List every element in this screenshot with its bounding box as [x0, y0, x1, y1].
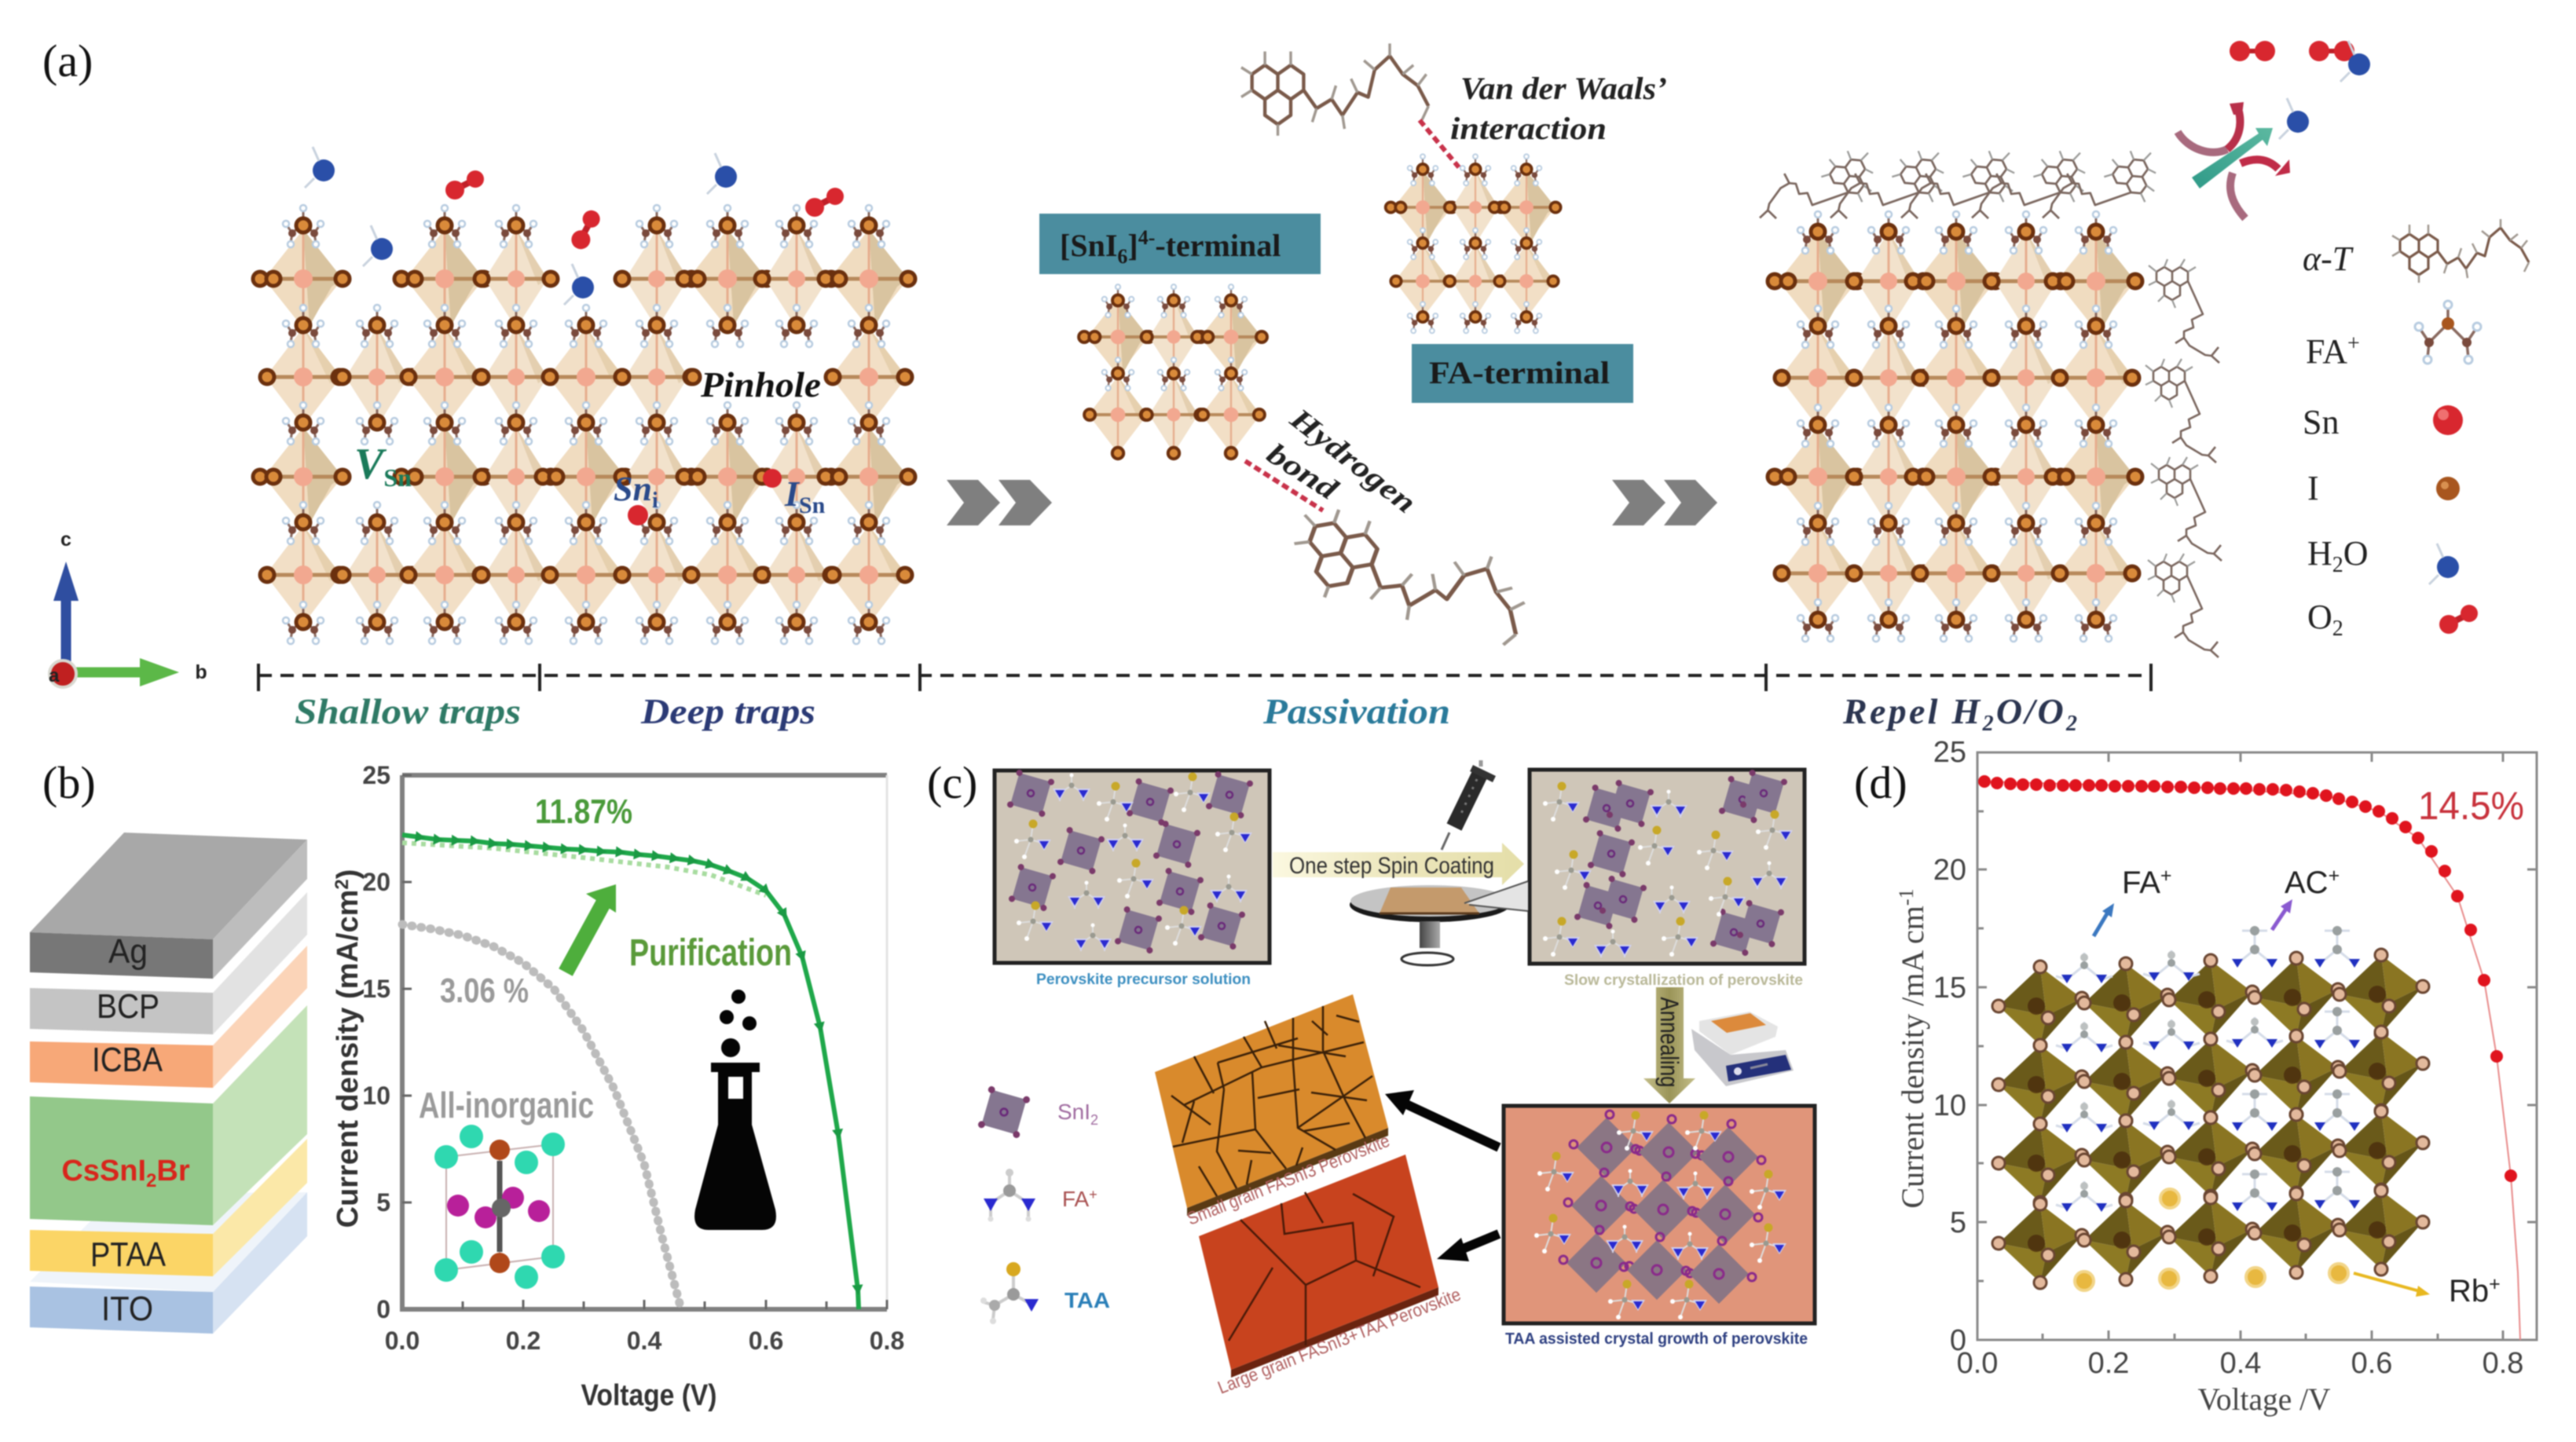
chart b x tick labels: 0.6: [749, 1327, 783, 1355]
process chevrons left: [947, 480, 1052, 525]
chart d x tick labels: 0.2: [2088, 1347, 2129, 1380]
arrow FA+: [2094, 903, 2114, 936]
legend FA+: +: [2347, 331, 2360, 356]
pipette: [1442, 760, 1494, 850]
passivated perovskite lattice: [1768, 211, 2142, 642]
chart b x axis title: Voltage (V): [581, 1379, 716, 1412]
alpha-T molecule van der Waals: [1241, 43, 1428, 136]
SnI6 terminal box: [1039, 214, 1321, 274]
dashed stage bracket: [258, 664, 2151, 691]
legend FA+: [2306, 301, 2481, 371]
chart d frame and ticks: [1977, 752, 2537, 1340]
legend Sn: Sn: [2303, 403, 2339, 441]
stage labels: 2: [1982, 712, 1994, 736]
label 11.87 percent: 11.87%: [535, 792, 632, 831]
chart b y axis title: Current density (mA/cm: [332, 890, 365, 1228]
label AC+: AC: [2285, 866, 2329, 900]
van der Waals label: interaction: [1450, 111, 1607, 146]
large grain film: [1199, 1155, 1438, 1378]
layer PTAA: PTAA: [90, 1235, 167, 1274]
legend SnI2: [977, 1085, 1098, 1139]
pinhole label: Pinhole: [700, 364, 821, 404]
efficiency label: 14.5%: [2418, 784, 2524, 828]
process chevrons right: [1612, 480, 1717, 525]
hydrogen dashed bond: [1245, 461, 1323, 511]
chart b y tick labels: [362, 761, 390, 1323]
chart d x tick labels: 0.0: [1957, 1347, 1998, 1380]
panel b: device stack and JV curve: [30, 757, 904, 1412]
alpha-T molecule hydrogen bond: [1281, 492, 1538, 663]
I_Sn label: I: [785, 474, 799, 514]
JV data points: [1978, 775, 2517, 1182]
chart b y tick labels: 20: [362, 868, 390, 896]
SnI6 terminal box: -terminal: [1155, 228, 1281, 263]
defect atoms: [628, 469, 782, 525]
layer perovskite: 2: [146, 1170, 156, 1191]
arrow to small grain film: [1385, 1090, 1499, 1147]
TAA assisted growth box: [1504, 1106, 1815, 1323]
legend Sn: [2303, 403, 2463, 441]
chart d y tick labels: 15: [1933, 972, 1966, 1005]
hydrogen bond label: bond: [1261, 437, 1344, 507]
layer Ag: [30, 833, 307, 979]
layer perovskite: Br: [156, 1155, 190, 1188]
layer perovskite: CsSnI: [61, 1155, 146, 1188]
JV chart: [332, 761, 904, 1412]
FA-terminal box: FA-terminal: [1429, 355, 1610, 390]
spin coating arrow: One step Spin Coating: [1289, 853, 1494, 879]
label all-inorganic: All-inorganic: [419, 1085, 594, 1125]
caption TAA growth: TAA assisted crystal growth of perovskite: [1505, 1330, 1808, 1348]
stage labels: Deep traps: [640, 691, 815, 731]
alpha-T side capping layer: [2145, 259, 2222, 657]
layer Ag: Ag: [108, 932, 148, 971]
FA-terminal box: [1412, 344, 1633, 403]
stage labels: Repel H: [1843, 691, 1980, 731]
hotplate: [1691, 1012, 1794, 1086]
chart b x tick labels: 0.4: [627, 1327, 661, 1355]
legend H2O: [2307, 534, 2459, 584]
label FA+: +: [2160, 865, 2172, 887]
fitted JV line: [1984, 781, 2520, 1340]
panel label b: (b): [42, 757, 96, 808]
slow crystallization box: [1530, 769, 1805, 964]
precursor solution box: [995, 769, 1270, 963]
crystal axes: a: [49, 665, 60, 686]
stage labels: Passivation: [1262, 691, 1450, 731]
annealing arrow: Annealing: [1655, 997, 1684, 1087]
chart b y tick labels: 0: [376, 1295, 390, 1323]
curve all-inorganic control: [402, 924, 681, 1309]
chart d y tick labels: [1933, 736, 1966, 1357]
panel c: film formation process: [927, 757, 1815, 1398]
chart d y axis title: -1: [1895, 888, 1918, 906]
small grain film: [1155, 994, 1388, 1216]
curve purified: [402, 835, 859, 1309]
layer ITO: ITO: [101, 1290, 153, 1328]
repelled molecules and arrows: [2178, 41, 2370, 218]
legend FA+: FA: [2306, 332, 2347, 371]
chart b y axis title: 2: [332, 879, 353, 890]
V_Sn label: Sn: [383, 463, 412, 492]
layer ICBA: [30, 946, 307, 1088]
legend SnI2: SnI: [1057, 1100, 1090, 1124]
chart b x tick labels: 0.8: [870, 1327, 904, 1355]
chart d y tick labels: 20: [1933, 854, 1966, 887]
label Rb+: Rb: [2449, 1274, 2489, 1308]
label FA+: FA: [2122, 866, 2160, 900]
layer perovskite: [30, 1005, 307, 1225]
crystal axes: c: [60, 529, 71, 551]
caption slow crystallization: Slow crystallization of perovskite: [1564, 972, 1803, 989]
chart d x tick labels: [1957, 1347, 2523, 1380]
green improvement arrow: [566, 884, 616, 972]
van der Waals dashed bond: [1420, 120, 1459, 167]
alpha-T top capping layer: [1760, 144, 2157, 227]
caption small grain: Small grain FASnI3 Perovskite: [1184, 1130, 1392, 1229]
hydrogen bond label: [1261, 401, 1422, 520]
legend H2O: 2: [2332, 553, 2343, 577]
panel label c: (c): [927, 757, 977, 808]
legend TAA: TAA: [1064, 1288, 1110, 1312]
SnI6 terminal box: ]: [1127, 228, 1138, 263]
panel label a: (a): [42, 35, 93, 86]
legend O2: [2307, 598, 2478, 641]
chart d y tick labels: 0: [1950, 1324, 1966, 1357]
legend TAA: [980, 1262, 1110, 1324]
legend FA+: [984, 1169, 1097, 1222]
label AC+: +: [2329, 865, 2340, 887]
crystal axes: [49, 529, 207, 687]
caption precursor: Perovskite precursor solution: [1036, 972, 1251, 988]
layer BCP: BCP: [97, 987, 159, 1026]
crystal structure: [1992, 926, 2429, 1290]
legend I: [2307, 469, 2460, 507]
panel label d: (d): [1854, 757, 1907, 808]
chart d y tick labels: 10: [1933, 1089, 1966, 1122]
hydrogen bond label: Hydrogen: [1284, 401, 1422, 520]
panel d: JV curve with crystal structure: [1854, 736, 2537, 1417]
arrow Rb+: [2354, 1273, 2430, 1297]
chart b y tick labels: 10: [362, 1082, 390, 1110]
device layer stack: [30, 833, 307, 1334]
chart b x tick labels: 0.0: [385, 1327, 420, 1355]
chart b y axis title: ): [332, 869, 365, 879]
curve purified reverse scan: [402, 843, 766, 895]
SnI6-terminated slab: [1079, 284, 1267, 459]
chart b y tick labels: 5: [376, 1188, 390, 1217]
SnI6 terminal box: [SnI: [1060, 228, 1117, 263]
defective perovskite lattice: [253, 205, 915, 644]
legend H2O: H: [2307, 534, 2332, 573]
legend alpha-T: [2303, 219, 2529, 283]
legend H2O: O: [2343, 534, 2369, 573]
legend alpha-T: α-T: [2303, 240, 2354, 278]
chart d x tick labels: 0.8: [2483, 1347, 2523, 1380]
annealing arrow: [1643, 987, 1695, 1103]
crystal axes: b: [195, 661, 207, 683]
legend I: I: [2307, 469, 2319, 507]
label Rb+: +: [2489, 1273, 2501, 1295]
icon: unit cell: [434, 1125, 565, 1289]
spin coater: [1350, 881, 1528, 965]
legend O2: O: [2307, 598, 2332, 636]
legend O2: 2: [2332, 617, 2343, 641]
Sn_i label: Sn: [614, 470, 652, 508]
Sn_i label: i: [652, 489, 658, 513]
chart d x tick labels: 0.6: [2351, 1347, 2392, 1380]
stage labels: [295, 691, 2077, 736]
legend: [2303, 219, 2529, 641]
arrow AC+: [2272, 899, 2292, 930]
spin coating arrow: [1273, 843, 1524, 885]
SnI6 terminal box: 4-: [1138, 226, 1155, 249]
legend FA+: +: [1089, 1187, 1097, 1202]
chart b x tick labels: [385, 1327, 904, 1355]
icon: flask: [694, 990, 776, 1230]
chart d y axis title: Current density /mA cm: [1895, 906, 1930, 1209]
label purification: Purification: [629, 932, 792, 974]
layer ICBA: ICBA: [92, 1041, 163, 1079]
stage labels: O/O: [1996, 691, 2064, 731]
legend SnI2: 2: [1090, 1112, 1098, 1128]
chart d x axis title: Voltage /V: [2198, 1382, 2331, 1417]
chart d x tick labels: 0.4: [2220, 1347, 2261, 1380]
chart b y tick labels: 15: [362, 975, 390, 1003]
layer PTAA: [30, 1139, 307, 1276]
van der Waals label: [1450, 71, 1667, 146]
chart b x tick labels: 0.2: [506, 1327, 540, 1355]
water and oxygen molecules above lattice: [305, 147, 844, 305]
stage labels: Shallow traps: [295, 691, 521, 731]
I_Sn label: Sn: [799, 492, 826, 518]
caption large grain: Large grain FASnI3+TAA Perovskite: [1215, 1284, 1464, 1398]
FA-terminated slab: [1386, 154, 1561, 333]
V_Sn label: V: [354, 440, 383, 489]
legend FA+: FA: [1062, 1187, 1089, 1211]
label 3.06 percent: 3.06 %: [440, 972, 529, 1010]
chart d y tick labels: 5: [1950, 1206, 1966, 1239]
van der Waals label: Van der Waals’: [1460, 71, 1667, 106]
layer BCP: [30, 892, 307, 1034]
SnI6 terminal box: 6: [1117, 245, 1127, 268]
stage labels: 2: [2065, 712, 2077, 736]
chart d y tick labels: 25: [1933, 736, 1966, 769]
chart b frame and ticks: [402, 775, 887, 1309]
panel a: defect passivation schematic: [42, 35, 2529, 736]
arrow to large grain film: [1437, 1234, 1499, 1261]
layer ITO: [30, 1192, 307, 1334]
chart b y tick labels: 25: [362, 761, 390, 789]
